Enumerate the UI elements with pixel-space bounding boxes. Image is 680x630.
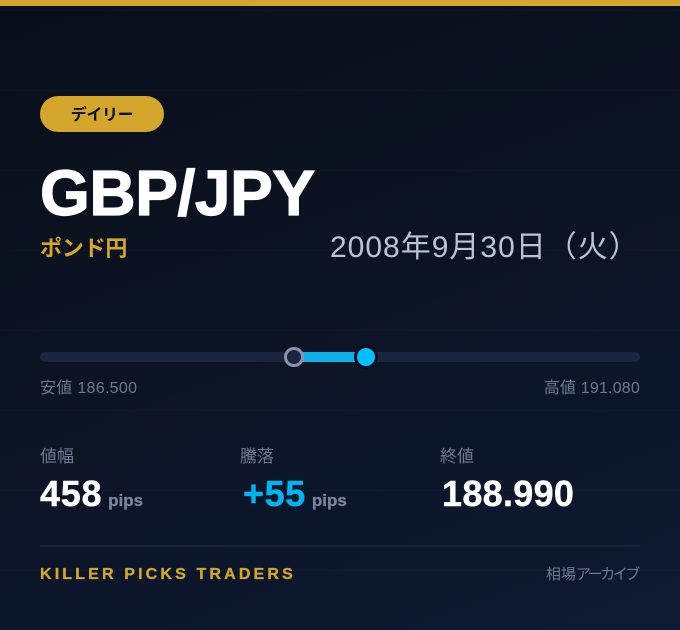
footer note: 相場アーカイブ (546, 566, 638, 583)
stat: close (440, 447, 574, 514)
stat value: 188.990 (442, 473, 574, 514)
slider track (40, 352, 640, 362)
low marker (284, 347, 304, 367)
stat label: 値幅 (40, 447, 74, 466)
stat: change (240, 447, 347, 514)
stat: range (40, 447, 143, 514)
badge: daily (40, 96, 164, 132)
title: currency pair: GBP/JPY (40, 157, 315, 229)
range slider (40, 345, 640, 369)
stat value: 458 pips (40, 473, 143, 514)
stat value: +55 pips (243, 473, 347, 514)
high label: 高値 191.080 (544, 380, 640, 397)
date: 2008年9月30日（火） (330, 231, 640, 264)
low label: 安値 186.500 (40, 380, 137, 397)
close marker (354, 345, 378, 369)
stat label: 騰落 (240, 447, 274, 466)
slider active range (294, 352, 366, 362)
stat label: 終値 (440, 447, 474, 466)
badge: daily: デイリー (71, 107, 133, 124)
footer brand: KILLER PICKS TRADERS (40, 566, 296, 583)
top accent bar (0, 0, 680, 6)
subtitle: pair name in Japanese: ポンド円 (40, 236, 127, 261)
